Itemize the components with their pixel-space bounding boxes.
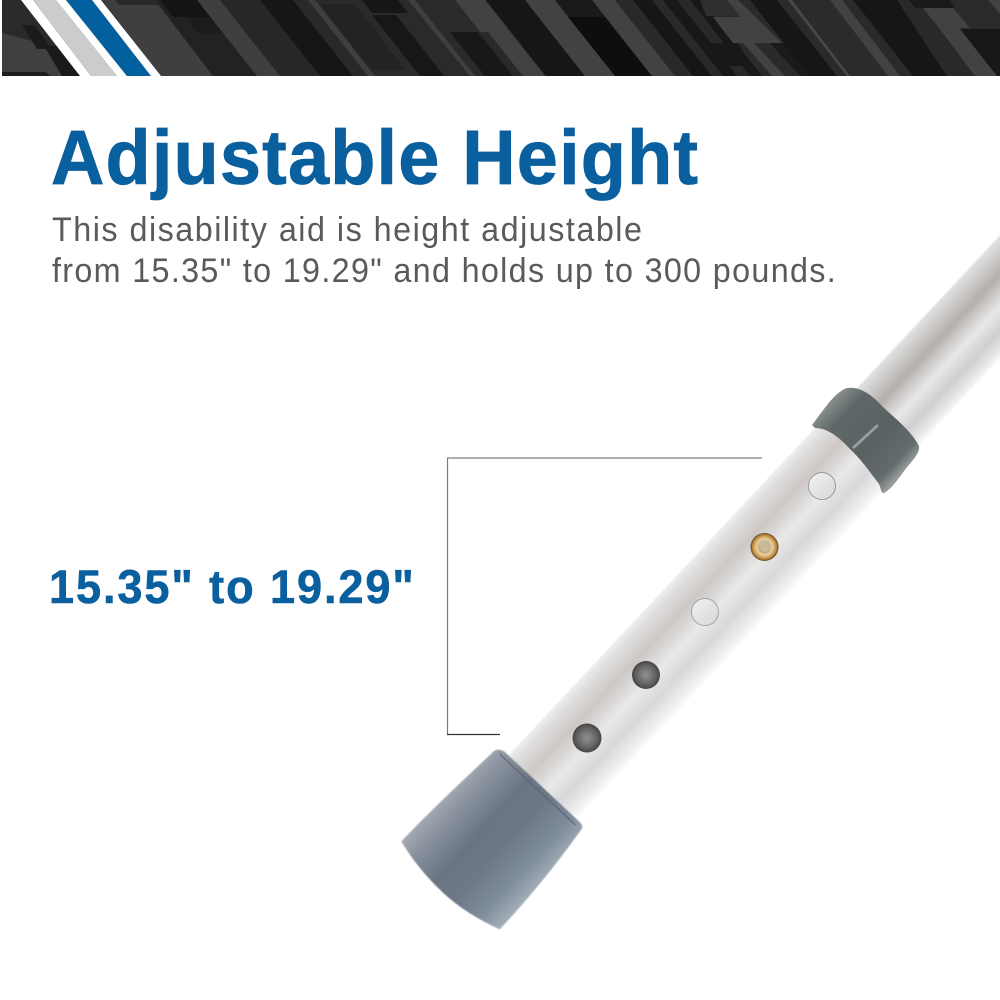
hole: open top (808, 472, 836, 500)
brass pin (750, 533, 778, 561)
hole: dark lower (572, 724, 602, 752)
upper tube (848, 106, 1000, 455)
collar (812, 388, 919, 493)
description text: This disability aid is height adjustable (52, 211, 642, 249)
description text: from 15.35" to 19.29" and holds up to 300 pounds. (52, 252, 836, 290)
hole: dark upper (632, 661, 660, 689)
title: Adjustable Height (51, 115, 698, 200)
header band (0, 0, 1000, 76)
crutch leg (395, 106, 1000, 938)
description text (52, 211, 836, 290)
header stripes (21, 0, 91, 76)
rubber tip (395, 742, 591, 938)
hole: open middle (692, 598, 718, 626)
height range label: 15.35" to 19.29" (49, 560, 414, 613)
lower tube (507, 420, 891, 820)
measurement bracket (447, 458, 762, 734)
